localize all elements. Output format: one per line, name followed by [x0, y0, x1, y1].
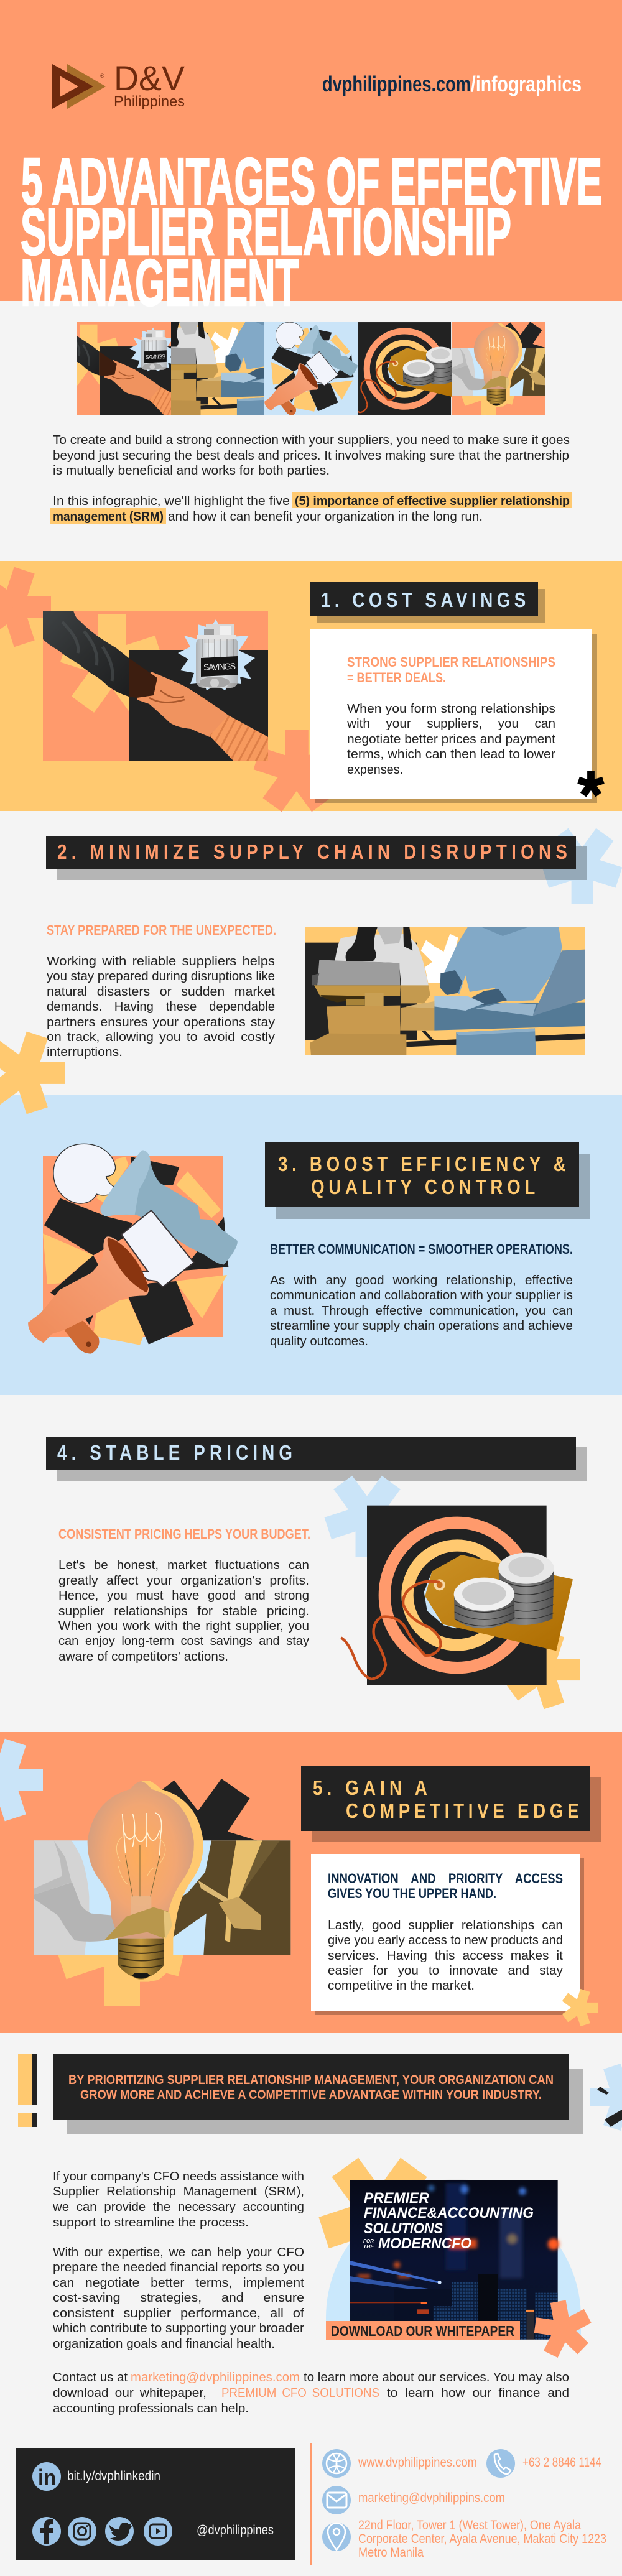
panel: section 5 background — [0, 1732, 622, 2033]
card: competitive edge text: GIVES YOU THE UPPER HAND. — [328, 1886, 496, 1901]
icon: youtube — [144, 2517, 172, 2546]
icon: linkedin — [32, 2462, 61, 2491]
heading: 3. boost efficiency and quality control — [265, 1142, 590, 1219]
card: competitive edge text: easier for you to innovate and stay — [328, 1964, 563, 1978]
text block: section 2: STAY PREPARED FOR THE UNEXPECTED. — [47, 922, 276, 938]
heading: premier finance and accounting solutions — [363, 2190, 534, 2252]
heading: premier finance and accounting solutions: THE — [363, 2244, 374, 2249]
text block: CFO assistance: consistent supplier performance, all of — [53, 2307, 304, 2320]
header band — [0, 0, 622, 301]
text: website: www.dvphilippines.com — [358, 2455, 477, 2470]
text block: contact: marketing@dvphilippines.com — [131, 2371, 300, 2384]
heading: 4. stable pricing — [46, 1437, 587, 1481]
whitepaper promo — [318, 2157, 596, 2361]
logo: D&V Philippines: ® — [100, 73, 104, 79]
text block: CFO assistance: prepare the needed financial reports so you — [53, 2261, 304, 2274]
icon: mail — [322, 2486, 351, 2514]
icon: linkedin: in — [38, 2465, 56, 2490]
decorative star: yellow behind whitepaper — [318, 2157, 440, 2273]
illustration: price tag, coins and rings — [341, 1506, 573, 1685]
text block: section 4 — [58, 1526, 310, 1664]
text block: CFO assistance: we can provide the necessary accounting — [52, 2200, 304, 2214]
text: email: marketing@dvphilippins.com — [358, 2491, 505, 2505]
text block: section 3: a must. Through effective communication, you can — [270, 1304, 573, 1318]
panel: section 3 background — [0, 1095, 622, 1395]
text block: contact: PREMIUM CFO SOLUTIONS — [221, 2386, 379, 2400]
contact details — [322, 2449, 606, 2560]
heading: premier finance and accounting solutions: FOR — [363, 2238, 374, 2244]
heading: 1. cost savings — [310, 582, 545, 623]
text: social handle: @dvphilippines — [197, 2523, 274, 2537]
heading: premier finance and accounting solutions: MODERNCFO — [378, 2235, 471, 2252]
text block: CFO assistance: can negotiate better terms, implement — [53, 2276, 304, 2290]
decorative star: orange below image — [253, 730, 340, 812]
thumbnail: light bulb — [452, 322, 545, 415]
text block: section 2 — [47, 922, 276, 1059]
text: address: 22nd Floor, Tower 1 (West Tower), One Ayala — [358, 2518, 581, 2532]
heading: 5. gain a competitive edge: 5. GAIN A — [313, 1777, 427, 1800]
text block: section 3 — [270, 1241, 573, 1348]
text block: CFO assistance: which contribute to supporting your broader — [52, 2322, 304, 2335]
text block: section 4: CONSISTENT PRICING HELPS YOUR BUDGET. — [58, 1526, 310, 1542]
illustration: light bulb and handshake — [34, 1779, 290, 2006]
heading: 3. boost efficiency and quality control: 3. BOOST EFFICIENCY & — [278, 1153, 566, 1176]
panel: section 1 background — [0, 561, 622, 811]
card: competitive edge text: give you early access to new products and — [328, 1934, 563, 1947]
decorative star: blue behind tag image — [325, 1476, 409, 1557]
text block: section 4: can enjoy long-term cost savings and stay — [58, 1634, 309, 1648]
text block: contact — [53, 2371, 569, 2416]
text block: section 2: Working with reliable suppliers helps — [47, 955, 275, 968]
decorative star: black — [577, 771, 605, 797]
website url: dvphilippines.com — [322, 72, 471, 96]
text block: section 2: interruptions. — [47, 1045, 123, 1059]
divider: vertical orange line — [310, 2443, 312, 2565]
intro text: In this infographic, we'll highlight the five — [53, 494, 290, 508]
intro text — [50, 433, 572, 524]
card: cost savings text: When you form strong relationships — [347, 702, 555, 716]
text block: section 2: on track, allowing you to avoid costly — [47, 1031, 275, 1044]
illustration: megaphones and speech bubbles — [28, 1144, 238, 1354]
logo: D&V Philippines — [52, 58, 185, 110]
button: download our whitepaper: DOWNLOAD OUR WHITEPAPER — [331, 2323, 514, 2339]
text block: CFO assistance — [52, 2170, 304, 2351]
text block: section 3: quality outcomes. — [270, 1335, 368, 1348]
heading: 4. stable pricing: 4. STABLE PRICING — [57, 1442, 292, 1465]
icon: instagram — [68, 2517, 96, 2546]
icon: phone — [486, 2449, 515, 2478]
text block: section 2: natural disasters or sudden market — [47, 985, 275, 999]
thumbnail: price tag and coins — [358, 322, 452, 415]
image: night city — [350, 2180, 559, 2340]
heading: premier finance and accounting solutions: PREMIER — [364, 2190, 430, 2207]
card: cost savings text: expenses. — [347, 763, 403, 777]
callout: closing statement — [53, 2054, 583, 2134]
intro text: and how it can benefit your organization in the long run. — [168, 510, 483, 524]
icon: exclamation mark — [18, 2054, 37, 2127]
panel: social links — [16, 2448, 295, 2560]
card: competitive edge text: Lastly, good supplier relationships can — [328, 1919, 563, 1932]
thumbnail: cost savings — [77, 322, 171, 415]
text block: contact: to learn more about our services. You may also — [304, 2371, 569, 2384]
text block: section 3: communication and collaboration with your supplier is — [270, 1289, 573, 1302]
text block: CFO assistance: cost-saving strategies, and ensure — [53, 2291, 304, 2305]
icon: facebook — [32, 2517, 61, 2546]
text block: section 4: aware of competitors' actions. — [58, 1650, 228, 1664]
logo: D&V Philippines: Philippines — [114, 93, 185, 110]
card: competitive edge text: INNOVATION AND PRIORITY ACCESS — [328, 1871, 563, 1886]
text block: section 2: demands. Having these dependable — [47, 1000, 275, 1014]
intro text: To create and build a strong connection with your suppliers, you need to make sure it goes — [53, 433, 570, 447]
logo: D&V Philippines: D&V — [114, 58, 185, 98]
heading: 1. cost savings: 1. COST SAVINGS — [321, 589, 526, 612]
card: cost savings text — [310, 629, 597, 803]
text block: CFO assistance: With our expertise, we can help your CFO — [53, 2246, 304, 2259]
text block: CFO assistance: Supplier Relationship Management (SRM), — [53, 2185, 304, 2198]
text block: section 4: greatly affect your organization's profits. — [58, 1574, 309, 1588]
decorative star: yellow left — [0, 1032, 65, 1114]
image strip: five illustration thumbnails — [77, 322, 545, 415]
heading: 5. gain a competitive edge: COMPETITIVE EDGE — [346, 1800, 579, 1823]
title: MANAGEMENT — [21, 246, 299, 320]
text block: CFO assistance: support to streamline the process. — [53, 2216, 249, 2230]
highlight: importance phrase — [50, 492, 572, 524]
card: competitive edge text: competitive in the market. — [328, 1979, 475, 1993]
intro text: (5) importance of effective supplier relationship — [295, 494, 570, 508]
heading: 2. minimize supply chain disruptions: 2. MINIMIZE SUPPLY CHAIN DISRUPTIONS — [57, 841, 567, 864]
decorative star: orange — [529, 2297, 596, 2361]
text block: CFO assistance: If your company's CFO needs assistance with — [53, 2170, 304, 2184]
text block: contact: accounting professionals can help. — [53, 2402, 249, 2416]
text block: section 3: streamline your supply chain operations and achieve — [270, 1319, 573, 1333]
heading: premier finance and accounting solutions: FINANCE&ACCOUNTING — [364, 2205, 534, 2222]
text block: contact: Contact us at — [53, 2371, 128, 2384]
card: cost savings text: with your suppliers, you can — [346, 717, 555, 731]
text block: section 4: Hence, you must have good and strong — [58, 1589, 309, 1603]
decorative arch: blue — [326, 2190, 581, 2339]
callout: closing statement: GROW MORE AND ACHIEVE A COMPETITIVE ADVANTAGE WITHIN YOUR INDUSTRY. — [80, 2088, 542, 2102]
text block: section 2: you stay prepared during disruptions like — [47, 970, 275, 983]
icon: twitter — [105, 2517, 134, 2546]
text block: contact: to learn how our finance and — [387, 2386, 569, 2400]
card: cost savings text: terms, which can then lead to lower — [347, 748, 555, 761]
decorative star: yellow behind tag image — [506, 1631, 580, 1709]
heading: 3. boost efficiency and quality control: QUALITY CONTROL — [311, 1176, 535, 1199]
text: linkedin link: bit.ly/dvphlinkedin — [67, 2469, 160, 2483]
text: address: Metro Manila — [358, 2546, 424, 2560]
decorative star: blue top left — [0, 1739, 43, 1821]
decorative star: small yellow — [562, 1989, 598, 2026]
card: cost savings text: STRONG SUPPLIER RELATIONSHIPS — [347, 654, 555, 670]
icon: location pin — [322, 2523, 351, 2551]
thumbnail: megaphones — [264, 322, 358, 415]
text block: section 4: Let's be honest, market fluctuations can — [58, 1559, 309, 1572]
callout: closing statement: BY PRIORITIZING SUPPLIER RELATIONSHIP MANAGEMENT, YOUR ORGANIZATION CAN — [68, 2073, 554, 2087]
website url: /infographics — [471, 72, 582, 96]
intro text: management (SRM) — [53, 510, 164, 524]
card: cost savings text: negotiate better prices and payment — [347, 733, 555, 746]
heading: 5. gain a competitive edge — [301, 1766, 601, 1842]
text block: section 2: partners ensures your operations stay — [47, 1016, 275, 1029]
thumbnail: supply chain — [171, 322, 264, 415]
decorative star: blue section 2 — [542, 828, 622, 904]
intro text: is mutually beneficial and works for both parties. — [53, 464, 330, 478]
text block: section 4: supplier relationships for stable pricing. — [58, 1605, 309, 1618]
heading: premier finance and accounting solutions: SOLUTIONS — [364, 2220, 443, 2237]
text block: section 3: As with any good working relationship, effective — [270, 1274, 573, 1287]
card: cost savings text: = BETTER DEALS. — [347, 670, 446, 685]
illustration: handshake and savings jar — [43, 611, 268, 761]
text: phone number: +63 2 8846 1144 — [522, 2455, 601, 2470]
heading: 2. minimize supply chain disruptions — [46, 836, 587, 880]
decorative star: orange top left — [0, 567, 51, 647]
decorative star: blue with black right edge — [590, 2064, 622, 2131]
card: competitive edge text: services. Having this access makes it — [328, 1949, 563, 1963]
text block: CFO assistance: organization goals and financial health. — [53, 2337, 275, 2351]
icon: globe — [322, 2449, 351, 2478]
title — [21, 145, 602, 320]
text block: contact: download our whitepaper, — [53, 2386, 207, 2400]
text block: section 4: When you work with the right supplier, you — [58, 1619, 309, 1633]
intro text: beyond just securing the best deals and prices. It involves making sure that the partnership — [53, 449, 569, 463]
card: competitive edge text — [311, 1854, 584, 2015]
text: address — [358, 2518, 606, 2560]
illustration: woman with boxes and man at laptop — [305, 927, 585, 1055]
